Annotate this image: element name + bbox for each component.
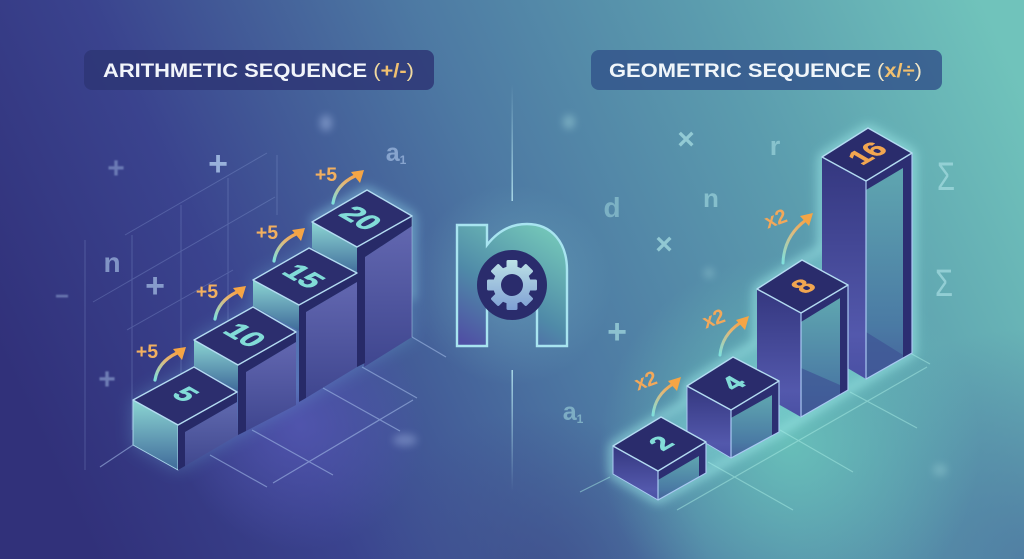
icon: gear [487, 260, 537, 310]
heading: geometric sequence [591, 50, 942, 90]
left floor grid [100, 337, 446, 487]
bar 16 [822, 128, 912, 379]
arrow +5 step 4 [315, 164, 364, 203]
step 20 [312, 190, 412, 367]
arrow x2 bar 3: x2 [762, 205, 790, 234]
arrow +5 step 3: +5 [256, 222, 278, 244]
step 10: 10 [215, 319, 273, 352]
arrow +5 step 4: +5 [315, 164, 337, 186]
symbol: plus dim: + [107, 152, 125, 185]
bars: geometric growth [613, 128, 912, 500]
left floating symbols [55, 139, 407, 396]
bars glow [613, 128, 912, 500]
bar 8 [757, 260, 848, 417]
arrow x2 bar 3 [762, 205, 813, 263]
bar 4 [687, 357, 779, 458]
step 15 [253, 248, 357, 402]
step 20: 20 [331, 202, 389, 235]
arrow +5 step 2 [196, 281, 246, 319]
arrows: times two [632, 205, 813, 415]
blurred left particles [320, 115, 417, 446]
step 5: 5 [165, 383, 206, 406]
symbol: r: r [770, 131, 781, 161]
arrow +5 step 3 [256, 222, 305, 261]
heading: geometric sequence: GEOMETRIC SEQUENCE (x/÷) [609, 60, 922, 82]
heading: arithmetic sequence: ARITHMETIC SEQUENCE (+/-) [103, 60, 414, 82]
bar 8: 8 [784, 275, 823, 298]
bar 4: 4 [714, 372, 753, 395]
symbol: plus: + [607, 313, 627, 351]
symbol: sigma top: Σ [937, 155, 955, 199]
symbol: minus: − [55, 283, 69, 310]
arrows: plus five [136, 164, 364, 380]
symbol: sigma lower: Σ [935, 263, 953, 305]
arrow +5 step 1 [136, 341, 186, 380]
symbol: a1: 1 [577, 412, 584, 426]
heading: arithmetic sequence [84, 50, 434, 90]
right floor grid [580, 353, 930, 510]
arrow x2 bar 2: x2 [700, 305, 728, 334]
symbol: plus bottom: + [98, 363, 116, 396]
step 15: 15 [274, 260, 332, 293]
symbol: a1: a [563, 398, 577, 426]
blurred right particles [563, 115, 947, 476]
symbol: times lower: × [655, 228, 673, 261]
right floating symbols [563, 123, 955, 426]
symbol: n: n [103, 247, 121, 278]
arrow x2 bar 1: x2 [632, 367, 660, 396]
symbol: a1: 1 [400, 153, 407, 167]
symbol: plus lower: + [145, 267, 165, 305]
gear badge [477, 250, 547, 320]
step 5 [133, 367, 238, 470]
symbol: a1: a [386, 139, 400, 167]
arrow +5 step 2: +5 [196, 281, 218, 303]
arrow x2 bar 2 [700, 305, 749, 355]
staircase glow [133, 190, 412, 470]
center divider lines [512, 84, 513, 491]
letter n [457, 224, 567, 346]
arrow +5 step 1: +5 [136, 341, 158, 363]
staircase: arithmetic steps [133, 190, 412, 470]
symbol: times: × [677, 123, 695, 156]
bar 2 [613, 417, 706, 500]
step 10 [194, 307, 296, 435]
gear hole [501, 274, 523, 296]
symbol: plus: + [208, 145, 228, 183]
center n logo with gear [457, 224, 567, 346]
bar 2: 2 [642, 432, 681, 455]
arrow x2 bar 1 [632, 367, 681, 415]
left background grid [85, 153, 277, 470]
symbol: d: d [603, 192, 621, 223]
bar 16: 16 [841, 138, 894, 169]
symbol: n: n [703, 183, 719, 213]
